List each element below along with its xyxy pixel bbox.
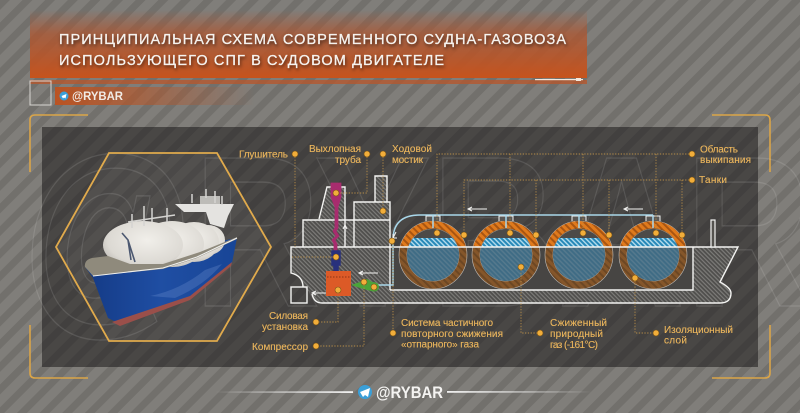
panel: diagram background <box>42 127 758 367</box>
label: LNG: Сжиженный <box>550 318 607 329</box>
deck <box>85 237 237 276</box>
header brand strip <box>30 81 255 105</box>
label: reliquefaction system <box>401 318 503 350</box>
label: exhaust pipe <box>309 144 361 166</box>
gas pipe <box>378 215 653 285</box>
exhaust pipe <box>331 183 341 250</box>
label: boil-off area: Область <box>700 144 738 156</box>
tanks <box>399 216 687 289</box>
label: silencer: Глушитель <box>239 150 288 160</box>
flow arrows <box>312 207 643 295</box>
label: bridge <box>392 144 432 166</box>
title text: ПРИНЦИПИАЛЬНАЯ СХЕМА СОВРЕМЕННОГО СУДНА-ГАЗОВОЗА <box>59 32 566 48</box>
domes <box>191 225 225 255</box>
label: exhaust pipe: Выхлопная <box>309 144 361 155</box>
superstructure <box>175 204 234 228</box>
label: exhaust pipe: труба <box>335 154 361 166</box>
tank 1 <box>399 216 467 289</box>
tank 3 <box>545 216 613 289</box>
marker dots <box>292 151 695 349</box>
frame corners <box>30 115 770 378</box>
compressor <box>351 279 379 292</box>
silencer <box>332 251 340 271</box>
label: bridge: мостик <box>392 155 424 166</box>
label: compressor: Компрессор <box>252 342 308 353</box>
title banner <box>30 10 587 84</box>
hexagon frame <box>56 153 271 341</box>
label: reliquefaction system: повторного сжижения <box>401 329 503 340</box>
label: LNG: газ (-161°С) <box>550 340 598 351</box>
label: power plant <box>262 311 308 333</box>
tank 2 <box>472 216 540 289</box>
label: tanks: Танки <box>699 175 727 186</box>
label: insulation <box>664 325 733 346</box>
label: boil-off area: выкипания <box>700 155 751 166</box>
hull and superstructure fill <box>291 247 738 303</box>
label: bridge: Ходовой <box>392 144 432 155</box>
label: power plant: установка <box>262 322 308 333</box>
label: insulation: Изоляционный <box>664 325 733 336</box>
label: LNG <box>550 318 607 351</box>
footer brand: @RYBAR <box>376 383 443 402</box>
label: insulation: слой <box>664 336 687 346</box>
leader lines <box>292 154 692 346</box>
label: power plant: Силовая <box>269 311 308 322</box>
header brand strip: @RYBAR <box>72 91 124 103</box>
tank 4 <box>619 216 687 289</box>
label: reliquefaction system: Система частичного <box>401 318 493 329</box>
power unit <box>326 271 351 296</box>
hull <box>85 238 237 324</box>
ship photo <box>85 189 237 326</box>
ship diagram <box>291 176 738 303</box>
label: boil-off area <box>700 144 751 166</box>
title text: ИСПОЛЬЗУЮЩЕГО СПГ В СУДОВОМ ДВИГАТЕЛЕ <box>59 53 444 69</box>
dome pipes <box>122 233 135 262</box>
label: LNG: природный <box>550 329 603 340</box>
title text <box>59 32 566 69</box>
footer brand <box>215 383 592 402</box>
outlines <box>291 247 738 303</box>
label: reliquefaction system: «отпарного» газа <box>401 340 479 350</box>
